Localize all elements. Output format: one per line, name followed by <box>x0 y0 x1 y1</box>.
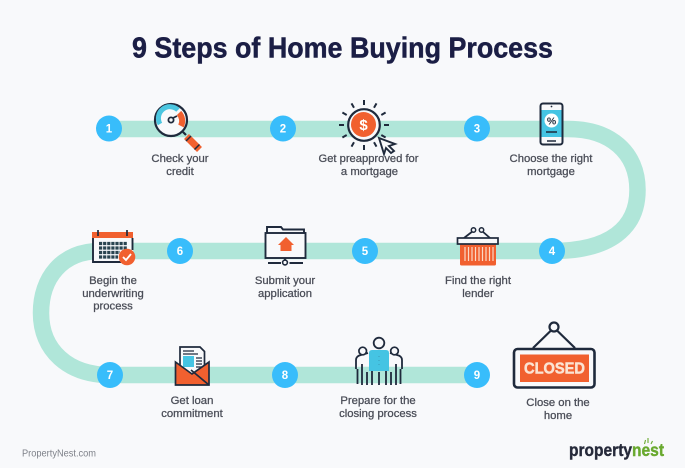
step number 4: 4 <box>549 246 556 258</box>
step 3 <box>464 104 593 178</box>
label: begin the underwriting process: Begin the <box>89 275 137 287</box>
step 8 <box>161 347 298 420</box>
icon: envelope with document <box>176 347 209 385</box>
step number 5: 5 <box>362 246 369 258</box>
title: 9 Steps of Home Buying Process <box>132 32 553 64</box>
step number 7: 7 <box>107 370 113 382</box>
step number 7 <box>97 362 123 388</box>
logo: propertynest: property <box>569 440 632 460</box>
step 1 <box>96 104 209 178</box>
label: find the right lender: Find the right <box>445 275 512 287</box>
icon: closed sign: CLOSED <box>524 361 585 378</box>
label: find the right lender: lender <box>462 288 494 300</box>
label: begin the underwriting process: underwriting <box>82 288 144 300</box>
logo: propertynest: nest <box>632 440 664 460</box>
step number 2 <box>270 116 296 142</box>
step 9 <box>339 338 490 420</box>
step number 6 <box>167 238 193 264</box>
label: check your credit: credit <box>166 166 195 178</box>
label: begin the underwriting process: process <box>93 300 133 312</box>
step 6 <box>167 227 315 300</box>
icon: folder with house <box>266 227 306 265</box>
step number 5 <box>352 238 378 264</box>
step number 3: 3 <box>474 124 480 136</box>
label: get loan commitment: commitment <box>161 408 224 420</box>
label: submit your application: Submit your <box>255 275 315 287</box>
icon: calendar with check <box>92 230 135 265</box>
icon: basket <box>458 228 498 266</box>
step number 6: 6 <box>177 246 183 258</box>
label: get preapproved for a mortgage: Get preapproved for <box>318 153 419 165</box>
icon: phone with percent: % <box>547 116 557 128</box>
step 4 <box>539 238 565 264</box>
footer url: PropertyNest.com <box>22 448 96 460</box>
step 10: closed sign <box>514 322 594 422</box>
step 7 <box>82 230 144 388</box>
label: prepare for the closing process: closing process <box>339 408 417 420</box>
step number 1: 1 <box>106 124 113 136</box>
step number 2: 2 <box>280 124 286 136</box>
label: get preapproved for a mortgage: a mortgage <box>341 166 398 178</box>
step number 9: 9 <box>474 370 480 382</box>
winding path <box>41 129 638 375</box>
label: close on the home: Close on the <box>526 397 590 409</box>
icon: dollar coin with cursor <box>339 100 395 154</box>
logo: propertynest <box>569 438 664 460</box>
step number 8: 8 <box>282 370 289 382</box>
step 2 <box>270 100 419 178</box>
icon: dollar coin with cursor: $ <box>359 117 368 134</box>
icon: magnifier with credit gauge <box>155 104 200 150</box>
label: close on the home: home <box>544 410 572 422</box>
label: choose the right mortgage: Choose the right <box>510 153 593 165</box>
label: choose the right mortgage: mortgage <box>527 166 575 178</box>
icon: group of people <box>356 338 402 385</box>
label: prepare for the closing process: Prepare for the <box>340 395 416 407</box>
step 5 <box>352 228 512 300</box>
label: check your credit: Check your <box>151 153 209 165</box>
label: get loan commitment: Get loan <box>171 395 213 407</box>
step number 9 <box>464 362 490 388</box>
label: submit your application: application <box>258 288 312 300</box>
